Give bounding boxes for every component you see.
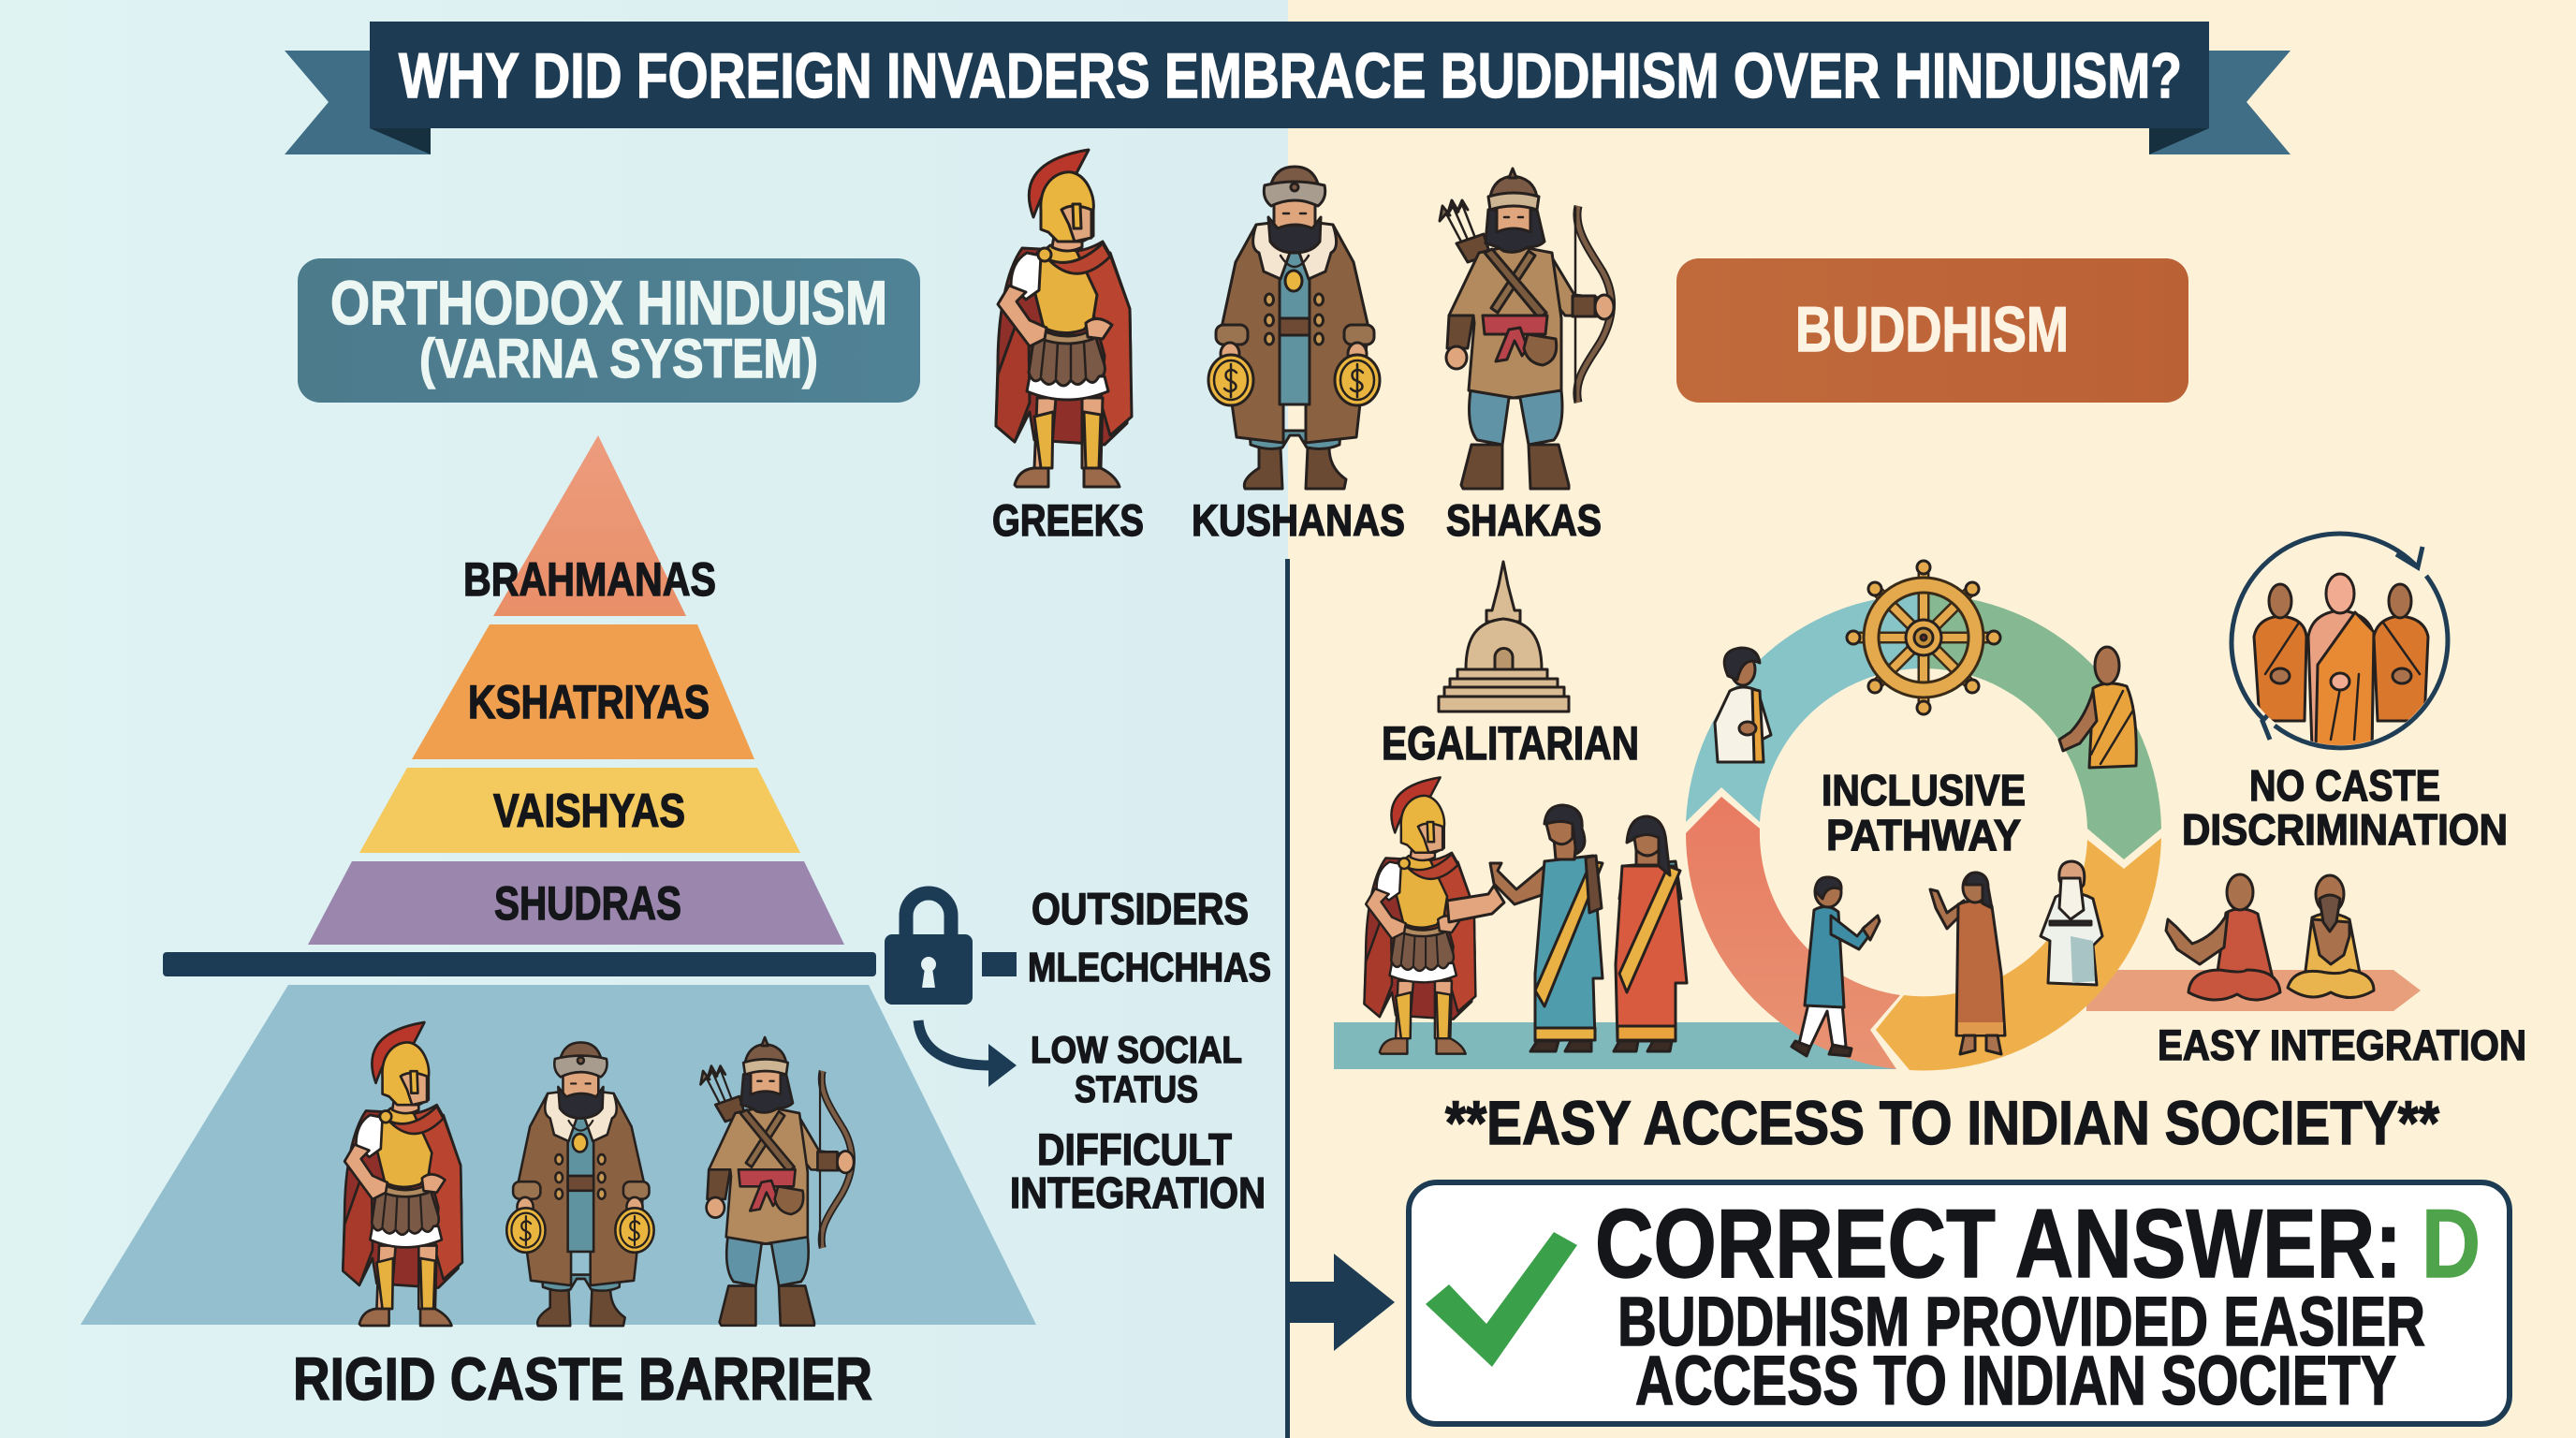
label: inclusive pathway: PATHWAY (1826, 811, 2021, 859)
label: Mlechchhas: MLECHCHHAS (1028, 945, 1271, 990)
icon: Shaka archer (1440, 169, 1614, 489)
tier: Vaishyas (359, 768, 800, 853)
icon: dharma wheel (1847, 561, 2000, 714)
tier: Shudras: SHUDRAS (494, 877, 681, 930)
panel header: orthodox Hinduism: ORTHODOX HINDUISM (330, 268, 887, 337)
figure: woman in white coat (1715, 648, 1771, 762)
ring segment: teal (1686, 594, 1924, 822)
title banner (285, 22, 2291, 154)
answer letter: D (2422, 1190, 2481, 1299)
tier: Kshatriyas (412, 624, 754, 759)
tier: Brahmanas (463, 435, 716, 616)
figure: boy in blue kurta (1792, 877, 1880, 1056)
tier: Kshatriyas: KSHATRIYAS (468, 676, 710, 728)
label: low social status (1031, 1030, 1242, 1110)
icon: Greek warrior below barrier (343, 1022, 462, 1326)
label: low social status: LOW SOCIAL (1031, 1030, 1242, 1071)
icon: green check mark (1426, 1232, 1577, 1367)
figure: monk in saffron (2059, 647, 2136, 768)
panel header: Buddhism (1676, 258, 2188, 403)
label: difficult integration: INTEGRATION (1010, 1168, 1266, 1217)
icon: Kushana noble (1208, 167, 1380, 489)
tier: Vaishyas: VAISHYAS (493, 785, 685, 837)
circular arrow (2232, 534, 2448, 748)
icon: Kushana noble below barrier (506, 1042, 654, 1326)
label: egalitarian: EGALITARIAN (1382, 717, 1639, 770)
three monks (2254, 574, 2428, 749)
background: right cream half (1288, 0, 2576, 1438)
ring segment: orange (1876, 838, 2161, 1070)
centre divider line (1285, 559, 1290, 1438)
label: no caste discrimination (2182, 761, 2508, 854)
figure: old sage in white (2041, 861, 2102, 985)
figure: woman in red saree (1614, 816, 1687, 1051)
tier: Brahmanas: BRAHMANAS (463, 553, 716, 606)
label: inclusive pathway (1822, 766, 2026, 859)
answer heading: CORRECT ANSWER: (1595, 1190, 2402, 1299)
label: rigid caste barrier: RIGID CASTE BARRIER (293, 1345, 872, 1413)
title text: WHY DID FOREIGN INVADERS EMBRACE BUDDHISM OVER HINDUISM? (399, 40, 2182, 111)
label: Shakas: SHAKAS (1446, 495, 1602, 545)
icon: Shaka archer below barrier (700, 1037, 854, 1326)
arrow: to answer box (1290, 1254, 1395, 1351)
label: no caste discrimination: DISCRIMINATION (2182, 805, 2508, 854)
icon: Greek warrior (996, 150, 1132, 487)
label: easy access to Indian society: **EASY ACCESS TO INDIAN SOCIETY** (1445, 1088, 2439, 1157)
tier: Shudras (308, 861, 844, 945)
panel header: orthodox Hinduism: (VARNA SYSTEM) (419, 329, 818, 389)
arrow: to low social status (918, 1020, 1017, 1087)
varna pyramid (308, 435, 844, 945)
background: left teal half (0, 0, 1288, 1438)
inclusive pathway ring (1686, 594, 2161, 1070)
figure: woman in brown dress (1930, 873, 2005, 1054)
figure: seated monk in yellow (2288, 875, 2374, 998)
teal ground arrow (1334, 1022, 1896, 1069)
label: inclusive pathway: INCLUSIVE (1822, 766, 2026, 814)
ring segment: red (1686, 797, 1900, 1069)
label: easy integration: EASY INTEGRATION (2158, 1021, 2526, 1069)
icon: monks in circle (2232, 534, 2448, 749)
panel header: orthodox Hinduism (298, 258, 920, 403)
figure: woman in teal saree (1490, 805, 1603, 1051)
figure: seated monk in red (2166, 874, 2280, 1000)
figure: Greek warrior in the scene (1364, 777, 1504, 1054)
label: outsiders: OUTSIDERS (1032, 884, 1249, 933)
label: Kushanas: KUSHANAS (1192, 495, 1405, 545)
panel header: Buddhism: BUDDHISM (1795, 294, 2069, 365)
answer box (1409, 1182, 2510, 1424)
label: no caste discrimination: NO CASTE (2249, 761, 2440, 810)
caste barrier bar (163, 952, 1017, 976)
label: low social status: STATUS (1075, 1069, 1198, 1110)
icon: padlock (885, 893, 973, 1005)
icon: stupa (1439, 562, 1569, 712)
label: difficult integration (1010, 1124, 1266, 1217)
label: Greeks: GREEKS (992, 495, 1144, 545)
lower trapezoid: outsiders below the barrier (80, 985, 1036, 1325)
ring segment: green (1924, 594, 2161, 859)
label: difficult integration: DIFFICULT (1037, 1124, 1232, 1174)
salmon integration arrow (2086, 970, 2421, 1011)
